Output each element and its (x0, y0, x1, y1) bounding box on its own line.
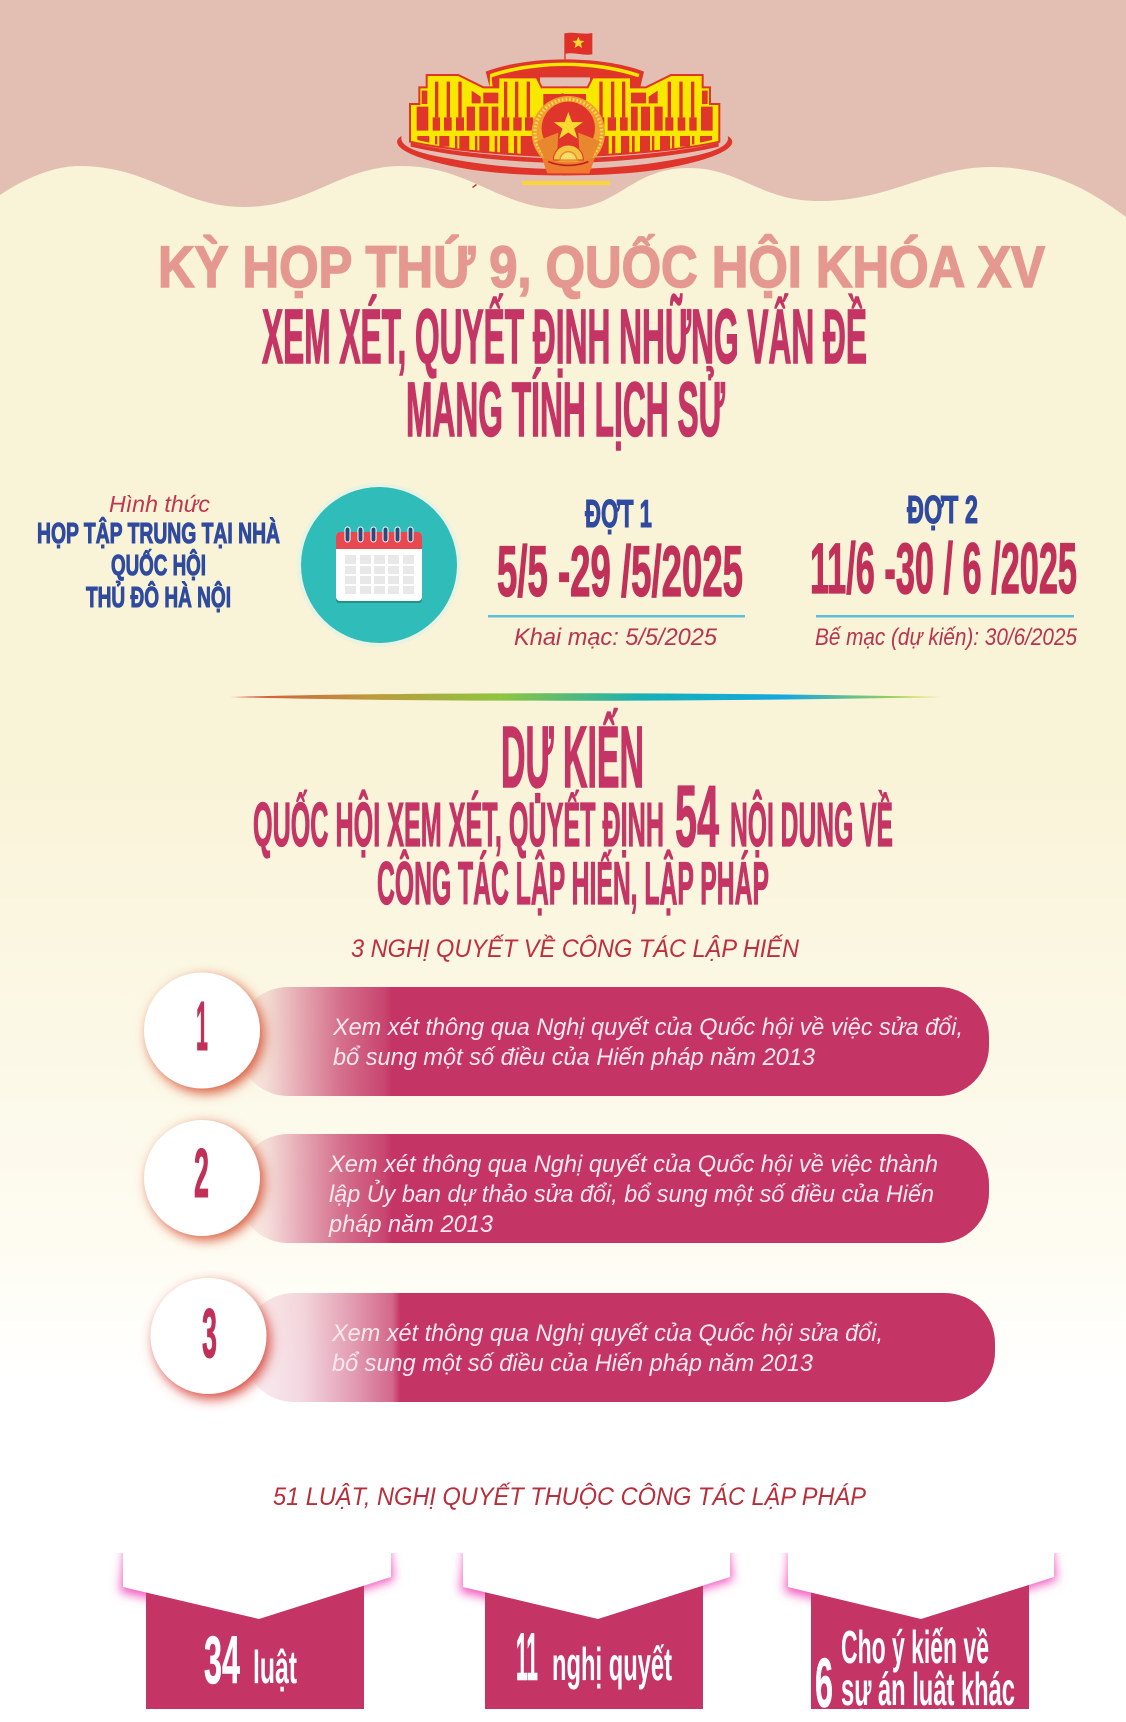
icon: flag (564, 33, 592, 59)
pill 3 (244, 1293, 995, 1402)
ribbon: 34 laws: luật (253, 1641, 297, 1693)
ribbon: 34 laws: 34 (204, 1622, 240, 1698)
heading: 54 items (253, 768, 893, 865)
ribbon: 6 other draft laws: 6 (815, 1644, 833, 1722)
icon: state emblem (532, 96, 605, 173)
text: DỰ KIẾN (501, 709, 644, 806)
session 2 dates: ĐỢT 2 (907, 489, 978, 532)
text block: meeting format: HỌP TẬP TRUNG TẠI NHÀ (37, 516, 280, 550)
badge 1: 1 (196, 987, 208, 1065)
text 2: lập Ủy ban dự thảo sửa đổi, bổ sung một số điều của Hiến (329, 1179, 934, 1208)
badge 3: 3 (202, 1294, 217, 1372)
ribbon: 6 other draft laws (785, 1540, 1057, 1722)
text 1: bổ sung một số điều của Hiến pháp năm 2013 (333, 1044, 816, 1071)
session 2 dates: Bế mạc (dự kiến): 30/6/2025 (815, 624, 1078, 651)
session 1 dates: ĐỢT 1 (585, 493, 652, 536)
ribbon: 11 resolutions: 11 (516, 1619, 538, 1695)
item 3 (150, 1278, 995, 1402)
pill 2 (238, 1134, 989, 1243)
text 1 (332, 1014, 963, 1071)
text block: meeting format: Hình thức (109, 491, 211, 517)
badge 3 (150, 1278, 266, 1394)
subheading: 51 laws: 51 LUẬT, NGHỊ QUYẾT THUỘC CÔNG TÁC LẬP PHÁP (273, 1481, 866, 1511)
text 2 (328, 1151, 938, 1238)
text 3 (331, 1320, 883, 1377)
badge 2 (144, 1120, 260, 1236)
text 3: bổ sung một số điều của Hiến pháp năm 2013 (332, 1350, 814, 1377)
text block: meeting format: QUỐC HỘI (111, 548, 206, 582)
session 2 dates (810, 489, 1078, 651)
ribbon: 11 resolutions (460, 1540, 733, 1709)
text 1: Xem xét thông qua Nghị quyết của Quốc hội về việc sửa đổi, (332, 1014, 963, 1041)
icon: calendar in teal circle (297, 483, 461, 647)
decorative bar under emblem (522, 181, 610, 185)
session 1 dates (488, 493, 745, 651)
badge 1 (144, 972, 260, 1088)
dome (486, 59, 644, 88)
subheading: 3 resolutions: 3 NGHỊ QUYẾT VỀ CÔNG TÁC LẬP HIẾN (351, 933, 800, 963)
text 2: Xem xét thông qua Nghị quyết của Quốc hội về việc thành (328, 1151, 938, 1178)
icon: national assembly building with flag and emblem (397, 33, 732, 188)
item 1 (144, 972, 989, 1096)
item 2 (144, 1120, 989, 1243)
pill 1 (238, 987, 989, 1096)
wavy header band (0, 0, 1126, 217)
heading: 54 items: 54 (675, 768, 719, 865)
rainbow divider (230, 693, 942, 701)
session 1 dates: Khai mạc: 5/5/2025 (514, 624, 718, 651)
text block: meeting format: THỦ ĐÔ HÀ NỘI (86, 580, 231, 614)
text block: meeting format (37, 491, 280, 614)
text 2: pháp năm 2013 (328, 1211, 494, 1238)
ribbon: 34 laws (120, 1540, 394, 1709)
ribbon: 11 resolutions: nghị quyết (552, 1638, 672, 1690)
badge 2: 2 (194, 1134, 209, 1212)
text 3: Xem xét thông qua Nghị quyết của Quốc hội sửa đổi, (331, 1320, 883, 1347)
session 1 dates: 5/5 -29 /5/2025 (497, 533, 743, 612)
